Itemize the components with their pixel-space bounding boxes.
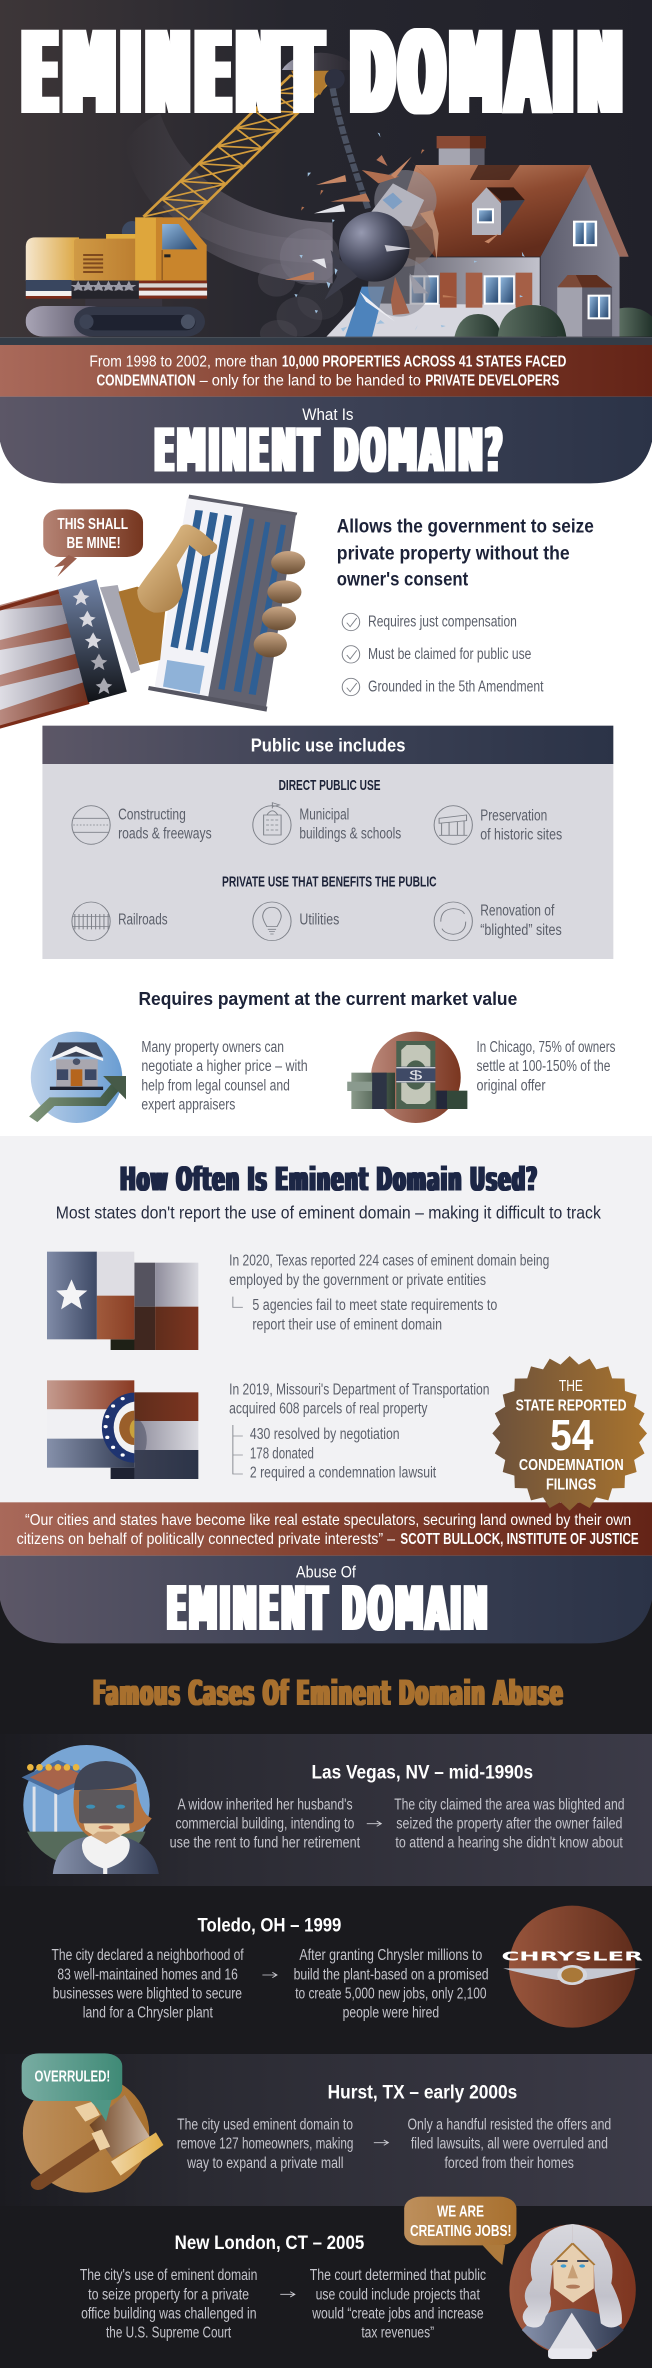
panel: public use includes: Constructing: [118, 805, 186, 823]
text: chrysler millions: build the plant-based on a promised: [294, 1965, 489, 1983]
hand: [119, 524, 305, 665]
dormer: [472, 187, 525, 235]
panel: public use includes: Preservation: [480, 807, 547, 824]
text: texas cases: employed by the government or private entities: [229, 1271, 486, 1289]
case title: hurst: Hurst, TX – early 2000s: [328, 2081, 517, 2103]
panel: public use includes: Public use includes: [251, 736, 405, 756]
icon: money stacks: [347, 1032, 467, 1123]
icon: renovation cycle: [434, 902, 472, 941]
text: remove homeowners: way to expand a private mall: [186, 2154, 343, 2172]
text: texas cases: report their use of eminent domain: [252, 1315, 442, 1333]
text: neighborhood blighted: businesses were blighted to secure: [53, 1984, 242, 2002]
text: supreme court challenge: [80, 2266, 257, 2341]
speech bubble: we are creating jobs: CREATING JOBS!: [410, 2222, 511, 2240]
crane body: [26, 217, 207, 306]
crane flag stripes: [26, 280, 207, 299]
panel: public use includes: Renovation of: [480, 902, 554, 919]
icon: missouri flag: [47, 1380, 198, 1479]
bay extension: [557, 275, 612, 337]
main statement: private property without the: [337, 542, 570, 564]
chrysler logo: [501, 1906, 643, 2028]
building: [148, 495, 297, 712]
panel: public use includes: [42, 726, 613, 959]
ground strip: [0, 337, 652, 345]
text: negotiate higher price: [141, 1038, 308, 1113]
arrow: [374, 2140, 388, 2145]
text: chicago offer: original offer: [477, 1076, 546, 1094]
text: court determined: use could include projects that: [316, 2285, 480, 2303]
badge: state reported 54 filings: FILINGS: [546, 1475, 596, 1493]
portrait: widow: [22, 1745, 159, 1874]
arm and sleeve: [0, 579, 140, 729]
what is section: [0, 495, 613, 959]
icon: texas flag: [47, 1252, 198, 1350]
icon: money stacks: $: [409, 1068, 423, 1083]
icon: road: [72, 806, 110, 844]
heading: what is: What Is: [302, 405, 353, 424]
text: supreme court challenge: the U.S. Supreme Court: [106, 2324, 231, 2341]
speech bubble: this shall be mine: BE MINE!: [67, 534, 121, 552]
checklist: [342, 613, 544, 696]
icon: house and rising arrow: [31, 1032, 126, 1123]
text: missouri parcels: [229, 1380, 489, 1481]
crane tracks: [26, 306, 205, 337]
text: negotiate higher price: expert appraisers: [141, 1096, 236, 1113]
panel: public use includes: PRIVATE USE THAT BENEFITS THE PUBLIC: [222, 873, 437, 890]
text: negotiate higher price: Many property owners can: [141, 1038, 284, 1056]
text: widow inherited: A widow inherited her husband's: [178, 1795, 353, 1813]
checklist: Requires just compensation: [368, 613, 517, 630]
text: supreme court challenge: office building was challenged in: [81, 2304, 257, 2322]
main statement: owner's consent: [337, 568, 468, 590]
intro statement: CONDEMNATION: [96, 372, 195, 389]
icon: municipal building: [253, 803, 291, 844]
crane head and pulley: [282, 53, 355, 95]
brown intro band: [0, 345, 652, 397]
text: neighborhood blighted: 83 well-maintained homes and 16: [57, 1965, 238, 1983]
text: chrysler millions: people were hired: [343, 2004, 439, 2021]
text: court determined: [310, 2266, 486, 2341]
icon: light bulb: [253, 902, 291, 941]
text: handful resisted: [408, 2115, 611, 2172]
text: handful resisted: forced from their homes: [445, 2154, 574, 2172]
quote band: citizens on behalf of politically connected private interests” –: [17, 1530, 395, 1548]
icon: gavel: [23, 2074, 163, 2193]
intro statement: PRIVATE DEVELOPERS: [425, 372, 559, 389]
speech bubble: this shall be mine: [43, 509, 143, 577]
text: widow inherited: [170, 1795, 360, 1851]
text: chicago offer: [477, 1038, 616, 1094]
text: court determined: The court determined that public: [310, 2266, 486, 2284]
text: neighborhood blighted: [52, 1946, 244, 2021]
house windows: [410, 221, 597, 308]
state seal: [102, 1393, 147, 1463]
speech bubble: we are creating jobs: [404, 2197, 516, 2265]
speech bubble: we are creating jobs: WE ARE: [437, 2203, 484, 2220]
panel: public use includes: “blighted” sites: [480, 921, 562, 939]
text: negotiate higher price: help from legal counsel and: [141, 1076, 290, 1094]
heading: abuse of: Abuse Of: [296, 1563, 357, 1581]
badge: state reported 54 filings: THE: [559, 1377, 583, 1395]
arrow: [262, 1972, 277, 1978]
speech bubble: this shall be mine: THIS SHALL: [57, 515, 128, 533]
panel: public use includes: Municipal: [299, 805, 349, 823]
page background: dark abuse section: [0, 1556, 652, 2368]
text: court determined: tax revenues”: [361, 2324, 434, 2341]
arrow: [367, 1821, 381, 1826]
case title: new london: New London, CT – 2005: [175, 2231, 364, 2253]
text: missouri parcels: 2 required a condemnation lawsuit: [250, 1463, 436, 1481]
text: missouri parcels: acquired 608 parcels of real property: [229, 1400, 428, 1417]
text: chrysler millions: to create 5,000 new jobs, only 2,100: [295, 1984, 487, 2002]
checklist: Must be claimed for public use: [368, 645, 531, 663]
payment section: [31, 989, 616, 1223]
wrecking chain: [333, 88, 368, 208]
navy heading panel: abuse: [0, 1556, 652, 1643]
chrysler logo: CHRYSLER: [501, 1950, 643, 1964]
main statement: [337, 515, 594, 590]
text: remove homeowners: The city used eminent domain to: [177, 2115, 353, 2133]
panel: public use includes: Utilities: [299, 911, 340, 928]
text: remove homeowners: [177, 2115, 353, 2172]
case section: hurst and new london: [0, 2053, 652, 2359]
panel: public use includes: DIRECT PUBLIC USE: [279, 777, 380, 794]
text: chrysler millions: After granting Chrysler millions to: [299, 1946, 482, 1964]
swing motion trail: [125, 113, 343, 347]
panel: hurst: [0, 2054, 652, 2206]
text: widow inherited: use the rent to fund her retirement: [170, 1834, 360, 1851]
panel: public use includes: Railroads: [118, 911, 168, 928]
intro statement: [89, 353, 566, 389]
case title: toledo: Toledo, OH – 1999: [198, 1914, 341, 1936]
panel: public use includes: buildings & schools: [299, 824, 401, 842]
page background: grey stats section: [0, 1136, 652, 1503]
hero background: [0, 0, 652, 337]
speech bubble: overruled: [22, 2053, 122, 2122]
heading: requires payment: Requires payment at the current market value: [138, 989, 517, 1009]
checklist: Grounded in the 5th Amendment: [368, 678, 544, 695]
text: supreme court challenge: to seize property for a private: [88, 2285, 249, 2303]
text: missouri parcels: 430 resolved by negotiation: [250, 1425, 400, 1443]
icon: railroad: [72, 902, 110, 941]
text: neighborhood blighted: The city declared a neighborhood of: [52, 1946, 244, 1964]
panel: public use includes: roads & freeways: [118, 824, 212, 842]
stats section: [0, 1252, 652, 1714]
panel: las vegas: [0, 1734, 652, 1886]
text: texas cases: [229, 1252, 549, 1333]
intro statement: – only for the land to be handed to: [200, 372, 421, 389]
arrow: [280, 2292, 295, 2297]
text: city seized: [394, 1795, 625, 1851]
text: widow inherited: commercial building, intending to: [175, 1815, 354, 1832]
house lower wall: [410, 257, 540, 310]
rubble and shards: [285, 133, 525, 337]
crane boom lattice: [143, 75, 335, 220]
badge: state reported 54 filings: 54: [550, 1412, 593, 1460]
text: court determined: would “create jobs and increase: [312, 2304, 484, 2322]
text: missouri parcels: 178 donated: [250, 1444, 314, 1462]
text: negotiate higher price: negotiate a higher price – with: [141, 1057, 308, 1075]
text: remove homeowners: remove 127 homeowners, making: [177, 2135, 353, 2152]
text: texas cases: 5 agencies fail to meet state requirements to: [252, 1296, 497, 1314]
panel: public use includes: of historic sites: [480, 826, 562, 843]
hero section: [0, 0, 652, 487]
navy heading panel: [0, 397, 652, 483]
icon: historic site: [434, 806, 472, 844]
portrait: judge: [509, 2224, 636, 2359]
quote band: [0, 1502, 652, 1556]
badge: state reported 54 filings: [492, 1356, 647, 1511]
intro statement: From 1998 to 2002, more than: [89, 353, 277, 370]
case section: las vegas and toledo: [0, 1734, 652, 2028]
text: supreme court challenge: The city's use of eminent domain: [80, 2266, 257, 2284]
case title: las vegas: Las Vegas, NV – mid-1990s: [311, 1761, 533, 1783]
bushes: [454, 314, 502, 337]
text: chrysler millions: [294, 1946, 489, 2021]
house: [326, 136, 629, 337]
speech bubble: overruled: OVERRULED!: [35, 2068, 110, 2085]
text: neighborhood blighted: land for a Chrysler plant: [83, 2004, 213, 2021]
text: missouri parcels: In 2019, Missouri's Department of Transportation: [229, 1380, 489, 1398]
